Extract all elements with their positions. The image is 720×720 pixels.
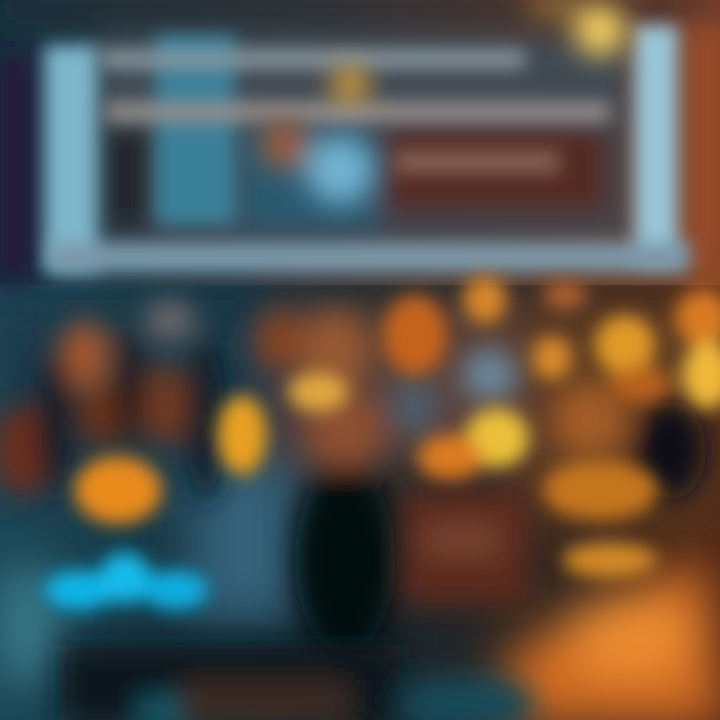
light blue pillars bbox=[44, 25, 678, 273]
audience: warm and dark figures bbox=[0, 302, 706, 655]
brown table in lower centre bbox=[400, 490, 530, 605]
dark teal foreground bbox=[60, 645, 535, 720]
cyan glow on table bbox=[44, 552, 209, 610]
blurred horizontal text bars on the sign bbox=[50, 50, 690, 274]
upper scene: sign board and columns bbox=[0, 0, 720, 290]
orange glowing foreground surface bbox=[495, 555, 720, 720]
audience: background tones bbox=[0, 300, 720, 680]
orange and yellow highlights bbox=[74, 276, 720, 578]
background: upper wall bbox=[0, 0, 720, 300]
background: lower room bbox=[0, 285, 720, 720]
lights at top bbox=[261, 0, 626, 204]
